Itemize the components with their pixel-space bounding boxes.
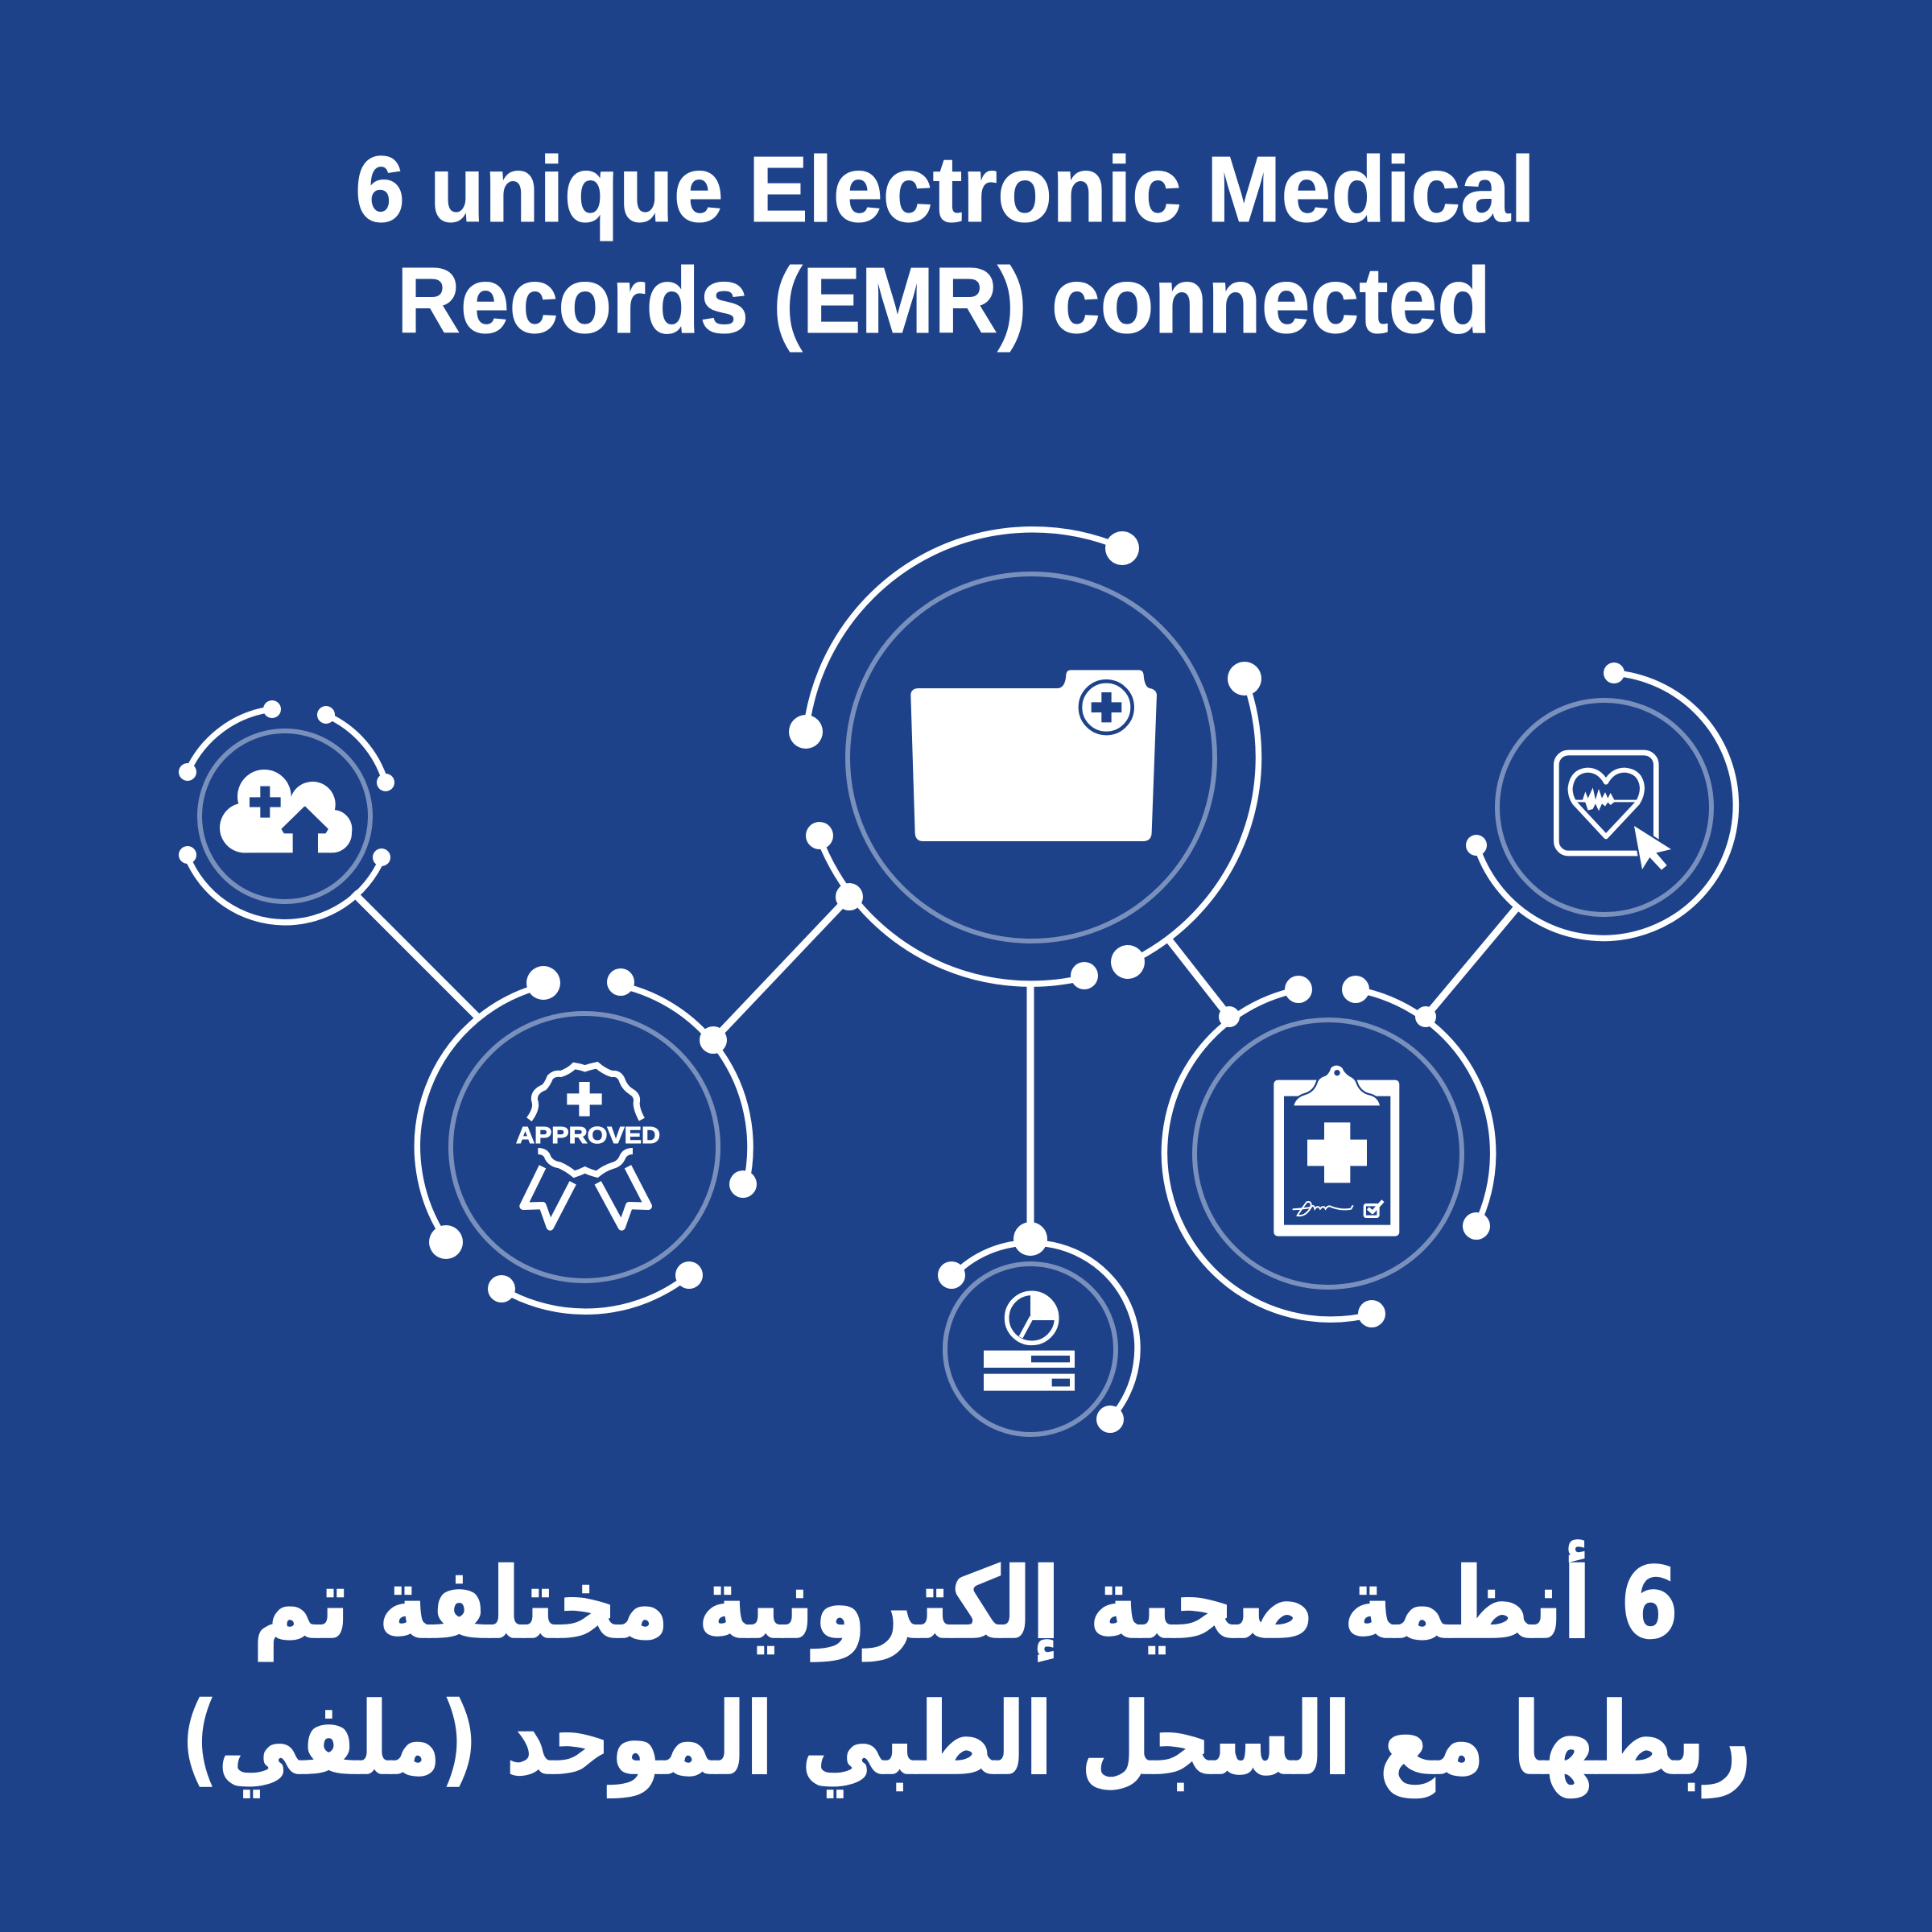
node: heart monitor [1466,663,1736,938]
title: Records (EMR) connected [397,248,1491,353]
icon: folder with medical cross [910,670,1157,841]
node: approved badge [417,966,757,1311]
connector lines [353,893,1517,1239]
title: 6 unique Electronic Medical [355,137,1535,242]
icon: pie chart and server bars [984,1293,1075,1391]
label: APPROVED: APPROVED [516,1123,660,1149]
node: central medical folder [789,530,1261,989]
icon: cloud with cross and arrow [220,770,352,854]
icon: clipboard with cross [1274,1066,1399,1236]
icon: approval rosette [523,1065,648,1227]
icon: heart on screen with cursor [1556,753,1671,870]
arabic heading [181,1540,1752,1798]
title [355,137,1535,353]
node: medical clipboard [1164,976,1493,1327]
arabic heading: 6 أنظمة صحية إلكترونية مختلفة تم [253,1540,1678,1662]
node: cloud upload [179,700,394,923]
node: chart and server [938,1222,1137,1435]
